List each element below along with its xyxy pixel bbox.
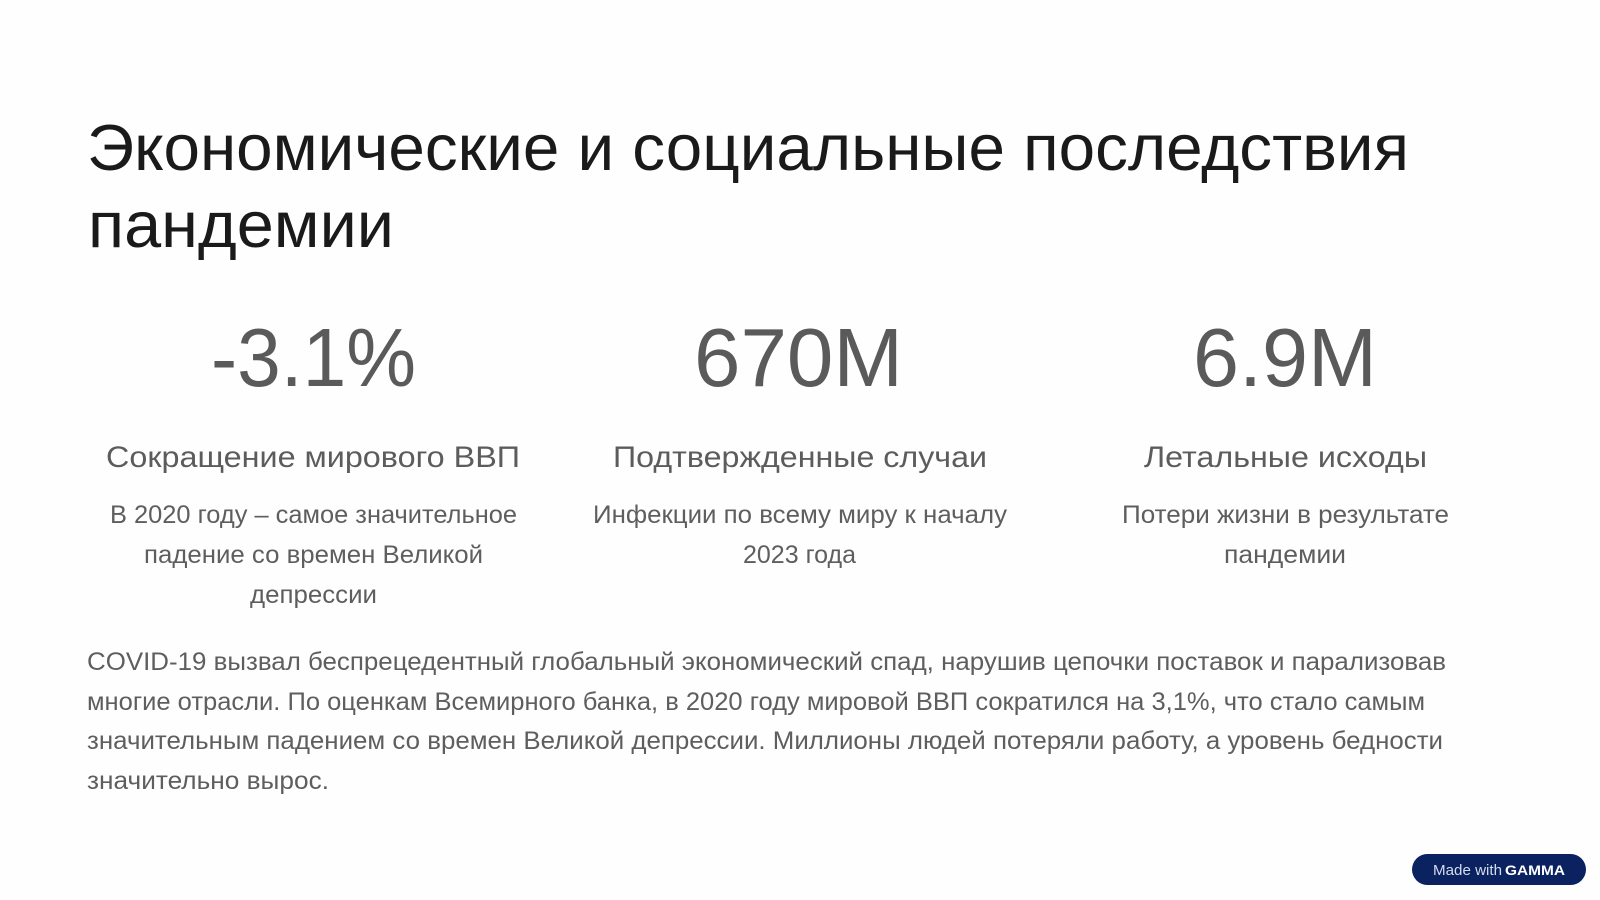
- stat description: deaths: Потери жизни в результате: [1122, 501, 1449, 529]
- stat description: confirmed cases: Инфекции по всему миру к началу: [593, 501, 1008, 529]
- stat description: deaths: пандемии: [1224, 541, 1346, 569]
- body paragraph: COVID-19 вызвал беспрецедентный глобальный экономический спад, нарушив цепочки поставок и парализовав: [87, 648, 1446, 676]
- body paragraph: многие отрасли. По оценкам Всемирного банка, в 2020 году мировой ВВП сократился на 3,1%, что стало самым: [87, 688, 1425, 716]
- stat number: 670M: 670M: [694, 311, 903, 404]
- stat number: -3.1%: -3.1%: [211, 311, 416, 404]
- panel: confirmed cases: [593, 311, 1008, 569]
- body paragraph: значительным падением со времен Великой депрессии. Миллионы людей потеряли работу, а уровень бедности: [87, 727, 1443, 755]
- stat heading: deaths: Летальные исходы: [1144, 441, 1427, 474]
- stat description: deaths: [1122, 501, 1449, 569]
- badge: Made with Gamma: Made with: [1433, 862, 1502, 879]
- stat description: confirmed cases: [593, 501, 1008, 569]
- stat description: GDP decline: [110, 501, 517, 609]
- badge: Made with Gamma: GAMMA: [1505, 862, 1565, 878]
- panel: deaths: [1122, 311, 1449, 569]
- stat heading: GDP decline: Сокращение мирового ВВП: [106, 441, 520, 474]
- title: пандемии: [88, 188, 394, 261]
- title: [87, 111, 1409, 261]
- stat number: 6.9M: 6.9M: [1193, 311, 1377, 404]
- stat description: GDP decline: депрессии: [250, 581, 377, 609]
- badge: Made with Gamma: [1412, 854, 1586, 885]
- stat description: GDP decline: падение со времен Великой: [144, 541, 483, 569]
- stat description: confirmed cases: 2023 года: [743, 541, 856, 569]
- title: Экономические и социальные последствия: [87, 111, 1409, 184]
- body paragraph: [87, 648, 1446, 795]
- panel: GDP decline: [106, 311, 520, 609]
- body paragraph: значительно вырос.: [87, 767, 329, 795]
- stat description: GDP decline: В 2020 году – самое значительное: [110, 501, 517, 529]
- stat heading: confirmed cases: Подтвержденные случаи: [613, 441, 987, 474]
